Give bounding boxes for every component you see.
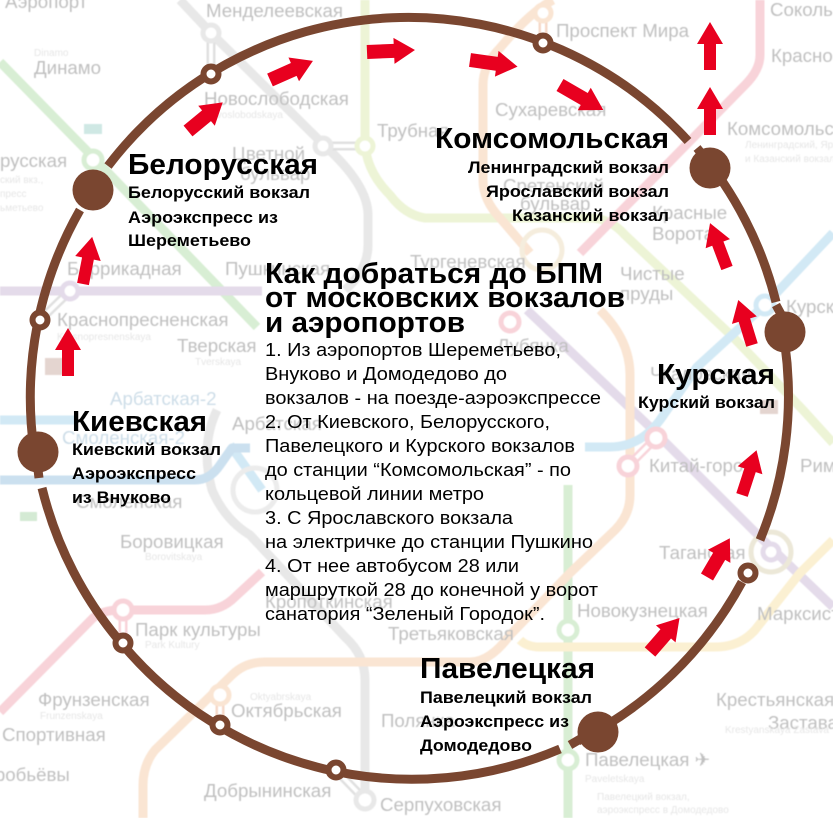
title [265, 258, 625, 339]
station names: Арбатская [232, 413, 322, 434]
station names: бульвар [240, 163, 310, 184]
label: Kievskaya: Аэроэкспресс [72, 464, 196, 483]
station names: Чкаловская [650, 363, 751, 384]
directions text: кольцевой линии метро [265, 484, 484, 504]
label: Komsomolskaya: Ленинградский вокзал [468, 158, 669, 177]
station names: Баррикадная [67, 258, 182, 279]
station names: Спортивная [2, 724, 106, 745]
station names: Трубная [377, 120, 449, 141]
label: Kurskaya: Курский вокзал [638, 393, 775, 412]
directions text: 4. От нее автобусом 28 или [265, 556, 519, 576]
station names: Краснопресненская [57, 309, 228, 330]
small transfer stations on ring [32, 36, 756, 778]
directions text: 2. От Киевского, Белорусского, [265, 412, 550, 432]
label: Belorusskaya [128, 149, 318, 250]
ring station hub: Belorusskaya [72, 170, 114, 210]
red direction arrows [55, 22, 769, 661]
station names: Павелецкий вокзал, [597, 792, 690, 803]
label: Belorusskaya: Шереметьево [128, 231, 251, 250]
station names: аэроэкспресс в Домодедово [597, 805, 729, 816]
line number badges [20, 124, 778, 521]
station names: Полянка [381, 710, 455, 731]
station names: Ворота [652, 223, 715, 244]
station names: Krestyanskaya Zastava [725, 725, 829, 736]
station names: Сухаревская [495, 99, 606, 120]
label: Komsomolskaya [435, 123, 669, 225]
directions text: 3. С Ярославского вокзала [265, 508, 514, 528]
station names: Novoslobodskaya [204, 110, 283, 121]
station names: Проспект Мира [556, 20, 690, 41]
station names: Добрынинская [204, 780, 331, 801]
label: Belorusskaya: Белорусский вокзал [128, 183, 310, 202]
station names: Сретенский [503, 175, 604, 196]
station names: Таганская [659, 542, 746, 563]
station names: Боровицкая [120, 531, 224, 552]
station names: Арбатская-2 [110, 388, 217, 409]
station names: Третьяковская [388, 623, 514, 644]
transfer passage connectors [40, 13, 656, 800]
directions text: маршруткой 28 до конечной у ворот [265, 580, 599, 600]
station names: Лубянка [497, 335, 569, 356]
station names: Кропоткинская [265, 591, 393, 612]
directions text: Павелецкого и Курского вокзалов [265, 436, 575, 456]
station names: Смоленская [76, 491, 182, 512]
station names: Tverskaya [195, 357, 242, 368]
station names: Park Kultury [145, 640, 199, 651]
station names: пруды [620, 283, 673, 304]
ring station hub: Kievskaya [18, 432, 58, 472]
station names: русская [0, 150, 67, 171]
directions text: до станции “Комсомольская” - по [265, 460, 571, 480]
station names: Чистые [620, 263, 685, 284]
directions text: санатория “Зеленый Городок”. [265, 604, 545, 624]
station names: Новокузнецкая [577, 600, 708, 621]
station names: бульвар [520, 193, 590, 214]
station names: Borovitskaya [145, 552, 203, 563]
ring station hub: Kurskaya [764, 312, 806, 352]
label: Belorusskaya: Аэроэкспресс из [128, 208, 278, 227]
label: Paveletskaya: Павелецкая [420, 653, 595, 685]
station names: Китай-город [649, 455, 754, 476]
label: Paveletskaya [420, 653, 595, 755]
directions text: Внуково и Домодедово до [265, 364, 507, 384]
station names: Серпуховская [380, 794, 501, 815]
station names: Менделеевская [206, 0, 343, 21]
station names: Oktyabrskaya [250, 692, 312, 703]
label: Komsomolskaya: Комсомольская [435, 123, 669, 155]
station names: Frunzenskaya [40, 711, 103, 722]
station names: Смоленская-2 [62, 427, 185, 448]
label: Paveletskaya: Аэроэкспресс из [420, 712, 569, 731]
label: Paveletskaya: Павелецкий вокзал [420, 688, 592, 707]
title: от московских вокзалов [265, 282, 625, 314]
label: Kurskaya [638, 359, 775, 412]
station names: Крестьянская [716, 689, 833, 710]
directions text [265, 340, 601, 624]
label: Kievskaya [72, 406, 221, 507]
label: Kurskaya: Курская [657, 359, 775, 391]
label: Komsomolskaya: Казанский вокзал [512, 206, 669, 225]
directions text: 1. Из аэропортов Шереметьево, [265, 340, 561, 360]
station names: Krasnopresnenskaya [57, 332, 151, 343]
station names: Новослободская [204, 88, 349, 109]
label: Kievskaya: из Внуково [72, 488, 171, 507]
label: Komsomolskaya: Ярославский вокзал [486, 182, 669, 201]
station names: Парк культуры [135, 619, 261, 640]
station names: Цветной [232, 143, 305, 164]
station names: Октябрьская [231, 700, 342, 721]
station names: ский вкз., [0, 175, 43, 186]
station names: Фрунзенская [38, 689, 150, 710]
station names: Dinamo [34, 48, 69, 59]
ring station hub: Komsomolskaya [690, 148, 730, 188]
station names: Тверская [177, 335, 257, 356]
station names: ьметьево [0, 203, 44, 214]
station names: Пушкинская [225, 258, 330, 279]
title: и аэропортов [265, 307, 465, 339]
label: Kievskaya: Киевская [72, 406, 207, 438]
directions text: на электричке до станции Пушкино [265, 532, 593, 552]
ring station hub: Paveletskaya [578, 712, 618, 752]
station names: пресс [0, 189, 27, 200]
label: Belorusskaya: Белорусская [128, 149, 318, 181]
station names: Павелецкая ✈ [585, 749, 710, 770]
label: Paveletskaya: Домодедово [420, 736, 532, 755]
station names: Красные [652, 202, 727, 223]
station names: Paveletskaya [585, 774, 645, 785]
station names: Тургеневская [410, 251, 526, 272]
title: Как добраться до БПМ [265, 258, 603, 290]
label: Kievskaya: Киевский вокзал [72, 440, 221, 459]
station names: Динамо [34, 57, 101, 78]
directions text: вокзалов - на поезде-аэроэкспрессе [265, 388, 601, 408]
